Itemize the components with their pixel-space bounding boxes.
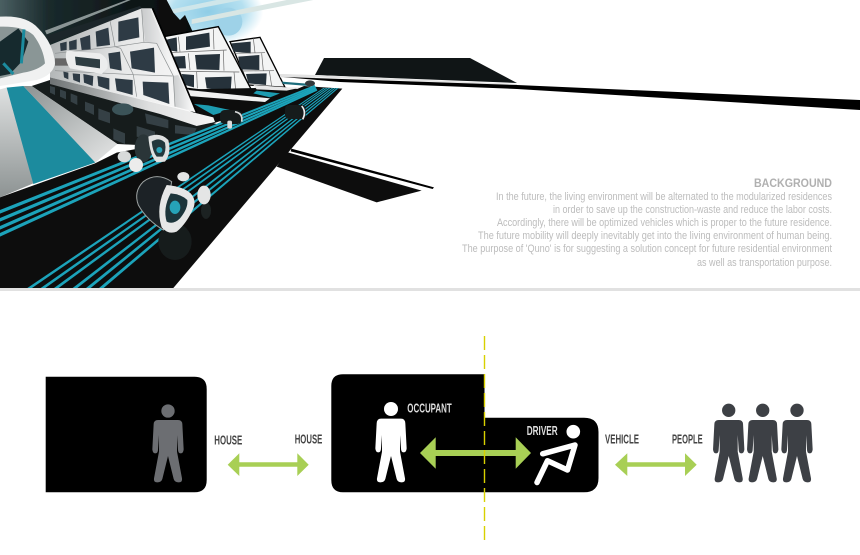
left large vehicle	[0, 16, 55, 86]
road shadow arm	[277, 149, 434, 202]
body copy: as well as transportation purpose.	[697, 257, 832, 269]
pod wheel of left vehicle	[55, 51, 108, 74]
label: house right: HOUSE	[295, 432, 322, 446]
heading: background: BACKGROUND	[754, 178, 832, 190]
horizon band	[315, 58, 517, 83]
section divider	[0, 288, 860, 291]
panel: diagram	[46, 336, 813, 540]
label: house left: HOUSE	[214, 433, 242, 447]
floor reflection dark	[32, 80, 217, 147]
horizon line	[280, 74, 860, 110]
road surface	[0, 86, 342, 288]
label: driver: DRIVER	[527, 424, 558, 438]
body copy	[462, 191, 832, 269]
arrow: house to house	[228, 453, 309, 476]
residence block stack far	[230, 37, 285, 87]
label: people: PEOPLE	[672, 432, 703, 446]
arrow: occupant to driver	[420, 437, 531, 469]
panel: hero road scene	[0, 0, 860, 288]
vehicle farthest	[305, 80, 315, 86]
residence block stack middle	[164, 26, 252, 90]
residence block stack near	[50, 8, 197, 113]
dashed divider	[484, 336, 486, 540]
label: occupant: OCCUPANT	[407, 402, 452, 416]
icon: grey person	[152, 404, 184, 482]
vehicle second	[118, 134, 169, 172]
dark wall behind residences	[0, 0, 192, 45]
near ledge	[50, 77, 215, 126]
vehicle far right lane	[285, 105, 306, 119]
vehicle small reflected	[112, 103, 211, 260]
floor grey and teal wedge	[0, 86, 117, 197]
icon: seated driver	[537, 425, 580, 482]
teal lanes lower	[27, 88, 339, 288]
vehicle far left lane	[220, 110, 242, 129]
house box	[46, 377, 207, 492]
vehicle large center	[137, 172, 211, 233]
label: vehicle: VEHICLE	[605, 432, 639, 446]
sky glow	[166, 0, 312, 43]
window reflections	[50, 86, 197, 144]
occupant and driver box	[331, 374, 598, 492]
arrow: vehicle to people	[615, 453, 697, 476]
city road illustration	[0, 0, 434, 288]
icon: three people	[713, 404, 813, 482]
text block: background	[462, 178, 832, 269]
ledges with teal strip	[188, 74, 317, 123]
icon: white occupant	[375, 402, 407, 482]
teal lanes upper	[0, 85, 317, 237]
